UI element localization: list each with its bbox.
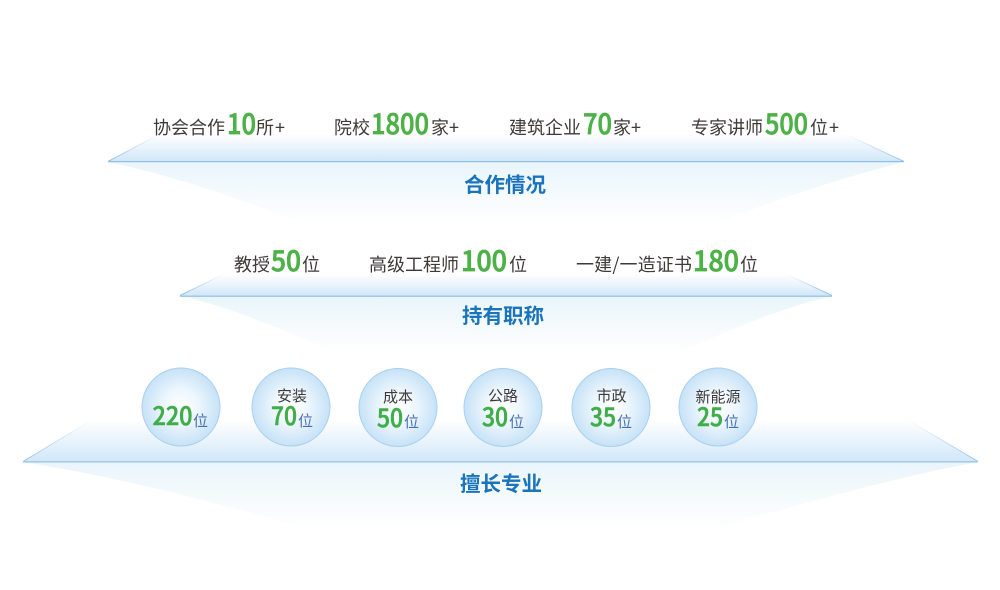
stat: associations: 10 — [227, 103, 256, 143]
circle: highway — [464, 368, 542, 446]
stat: senior engineers: 100 — [461, 240, 507, 280]
circle: cost: 位 — [404, 411, 419, 432]
circle: installation: 安装 — [277, 385, 307, 406]
circle: cost — [359, 368, 437, 446]
stat: construction firms — [509, 103, 641, 143]
circle: highway: 位 — [509, 411, 524, 432]
stat: professors — [234, 240, 320, 280]
circle: installation: 70 — [271, 397, 297, 433]
heading: partnership: 合作情况 — [464, 168, 546, 198]
circle: total 220: 220 — [152, 397, 192, 433]
circle: highway: 30 — [482, 398, 508, 434]
stat: construction firms: 70 — [583, 103, 612, 143]
circle: new energy: 新能源 — [695, 386, 741, 407]
circle: new energy: 25 — [697, 398, 723, 434]
stat: certified constructors: 一建/一造证书 — [576, 251, 692, 277]
circle: total 220 — [142, 368, 220, 446]
circle: new energy: 位 — [724, 411, 739, 432]
stat: senior engineers: 位 — [509, 251, 527, 277]
panel: specialties platform — [23, 420, 978, 532]
stat: associations: 所+ — [256, 114, 285, 140]
stat: senior engineers: 高级工程师 — [369, 251, 459, 277]
heading: specialties: 擅长专业 — [460, 467, 542, 497]
stat: certified constructors: 180 — [693, 240, 739, 280]
circle: municipal — [572, 368, 650, 446]
circle: installation: 位 — [298, 410, 313, 431]
circle: total 220: 位 — [193, 410, 208, 431]
circle: municipal: 位 — [617, 411, 632, 432]
circle: new energy — [679, 368, 757, 446]
stat: schools: 家+ — [431, 114, 459, 140]
stat: associations: 协会合作 — [153, 114, 225, 140]
stat: expert lecturers: 位+ — [810, 114, 839, 140]
stat: professors: 教授 — [234, 251, 270, 277]
circle: municipal: 35 — [590, 398, 616, 434]
stat: certified constructors — [576, 240, 758, 280]
stat: construction firms: 家+ — [613, 114, 641, 140]
stat: expert lecturers — [691, 103, 839, 143]
stat: professors: 位 — [302, 251, 320, 277]
panel: titles platform — [180, 274, 832, 356]
circle: municipal: 市政 — [596, 385, 627, 406]
stat: associations — [153, 103, 285, 143]
stat: expert lecturers: 500 — [765, 103, 808, 143]
circle: installation — [252, 368, 330, 446]
heading: titles: 持有职称 — [462, 299, 544, 329]
stat: expert lecturers: 专家讲师 — [691, 114, 763, 140]
circle: highway: 公路 — [488, 385, 518, 406]
circle: cost: 50 — [377, 399, 403, 435]
stat: schools: 院校 — [334, 114, 370, 140]
stat: certified constructors: 位 — [740, 251, 758, 277]
stat: construction firms: 建筑企业 — [509, 114, 581, 140]
panel: partnership platform — [108, 134, 904, 226]
stat: professors: 50 — [271, 240, 301, 280]
stat: senior engineers — [369, 240, 527, 280]
stat: schools — [334, 103, 459, 143]
circle: cost: 成本 — [383, 386, 413, 407]
stat: schools: 1800 — [371, 103, 429, 143]
